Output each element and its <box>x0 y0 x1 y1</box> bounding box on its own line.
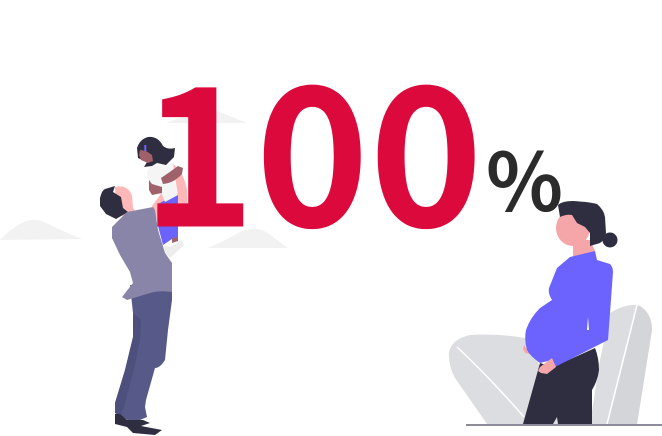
child's hair <box>137 137 175 167</box>
woman's hair <box>558 201 606 246</box>
woman's face <box>556 210 590 246</box>
woman's hand on belly <box>538 358 556 374</box>
man's trousers <box>115 285 172 423</box>
chair: right shaded part <box>608 305 652 424</box>
child's blue trousers <box>158 193 178 245</box>
woman's neck <box>573 240 595 257</box>
chair: left highlight line <box>457 347 524 417</box>
man's arm skin <box>152 163 188 224</box>
man's shoes <box>115 414 162 435</box>
cloud: middle <box>207 229 288 248</box>
child's shirt <box>147 163 178 202</box>
shirt highlight <box>587 317 589 330</box>
woman's trousers <box>523 348 599 424</box>
big number 100: 100 <box>142 2 483 282</box>
child's barrette <box>144 145 146 151</box>
man's hair <box>100 186 128 219</box>
percent sign: % <box>486 119 563 235</box>
chair: right cushion <box>590 305 652 424</box>
child's ankle <box>172 237 178 243</box>
chair: left cushion <box>449 334 560 424</box>
trouser shadow <box>115 313 141 416</box>
child's arms <box>149 166 183 195</box>
child's shoes <box>164 240 184 258</box>
man's shirt <box>112 207 172 300</box>
chair: right highlight line <box>607 305 637 424</box>
woman's lower hand <box>523 345 530 354</box>
figure: man lifting child <box>100 137 188 435</box>
cloud: top <box>166 110 247 123</box>
cloud: left <box>0 220 82 240</box>
child's face <box>139 150 153 163</box>
woman's hair bun <box>602 232 618 248</box>
armchair and pregnant woman <box>449 201 662 426</box>
floor line <box>466 424 662 426</box>
woman's shirt <box>525 251 613 367</box>
man's head <box>115 186 136 218</box>
